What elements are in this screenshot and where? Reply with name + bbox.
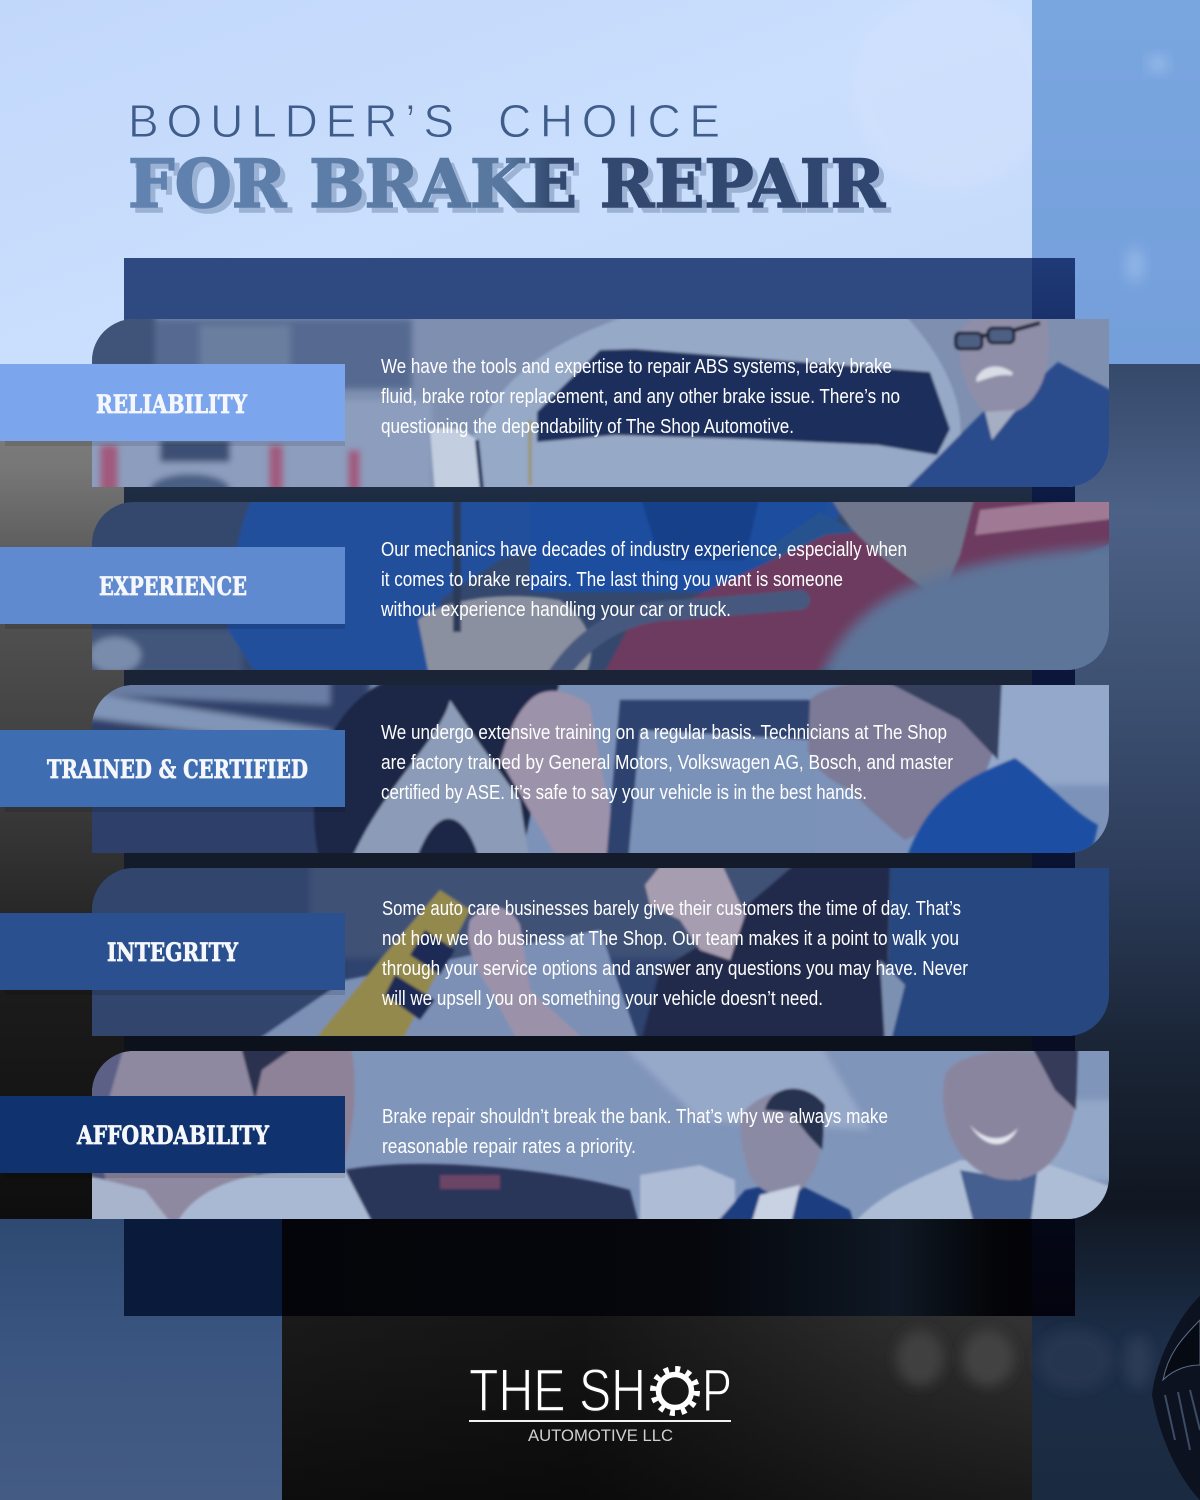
text: integrity [381, 898, 968, 1010]
label: experience: EXPERIENCE [99, 572, 247, 601]
tire at lower right [1152, 1296, 1200, 1500]
text: reliability: We have the tools and expertise to repair ABS systems, leaky brake [381, 356, 892, 378]
title line two: FOR BRAKE REPAIR [133, 150, 891, 228]
label: trained and certified: TRAINED & CERTIFIED [47, 755, 308, 784]
title line one [128, 95, 720, 147]
text: experience: Our mechanics have decades of industry experience, especially when [381, 539, 907, 561]
panel: integrity [0, 868, 1109, 1036]
figure: mechanic in navy jacket [712, 1089, 855, 1228]
label: trained and certified [0, 730, 345, 812]
photo: technician inspecting under car [92, 868, 1109, 1036]
panel: affordability [0, 1051, 1109, 1219]
logo: The Shop Automotive LLC: THE SH [469, 1357, 646, 1424]
text: affordability [382, 1106, 888, 1158]
text: trained and certified: certified by ASE. It’s safe to say your vehicle is in the best hands. [381, 782, 867, 804]
text: integrity: will we upsell you on something your vehicle doesn’t need. [381, 988, 823, 1010]
text: reliability: fluid, brake rotor replacement, and any other brake issue. There’s no [381, 386, 900, 408]
label: affordability [0, 1096, 345, 1178]
text: integrity: not how we do business at The Shop. Our team makes it a point to walk you [382, 928, 959, 950]
text: experience: without experience handling your car or truck. [380, 599, 731, 621]
logo: The Shop Automotive LLC [469, 1357, 732, 1445]
panel: trained and certified [0, 685, 1109, 853]
text: trained and certified [381, 722, 953, 804]
panel: reliability [0, 319, 1109, 487]
figure: mechanic [906, 319, 1109, 487]
title line one: BOULDER’S [128, 95, 454, 147]
title [128, 95, 891, 228]
logo: The Shop Automotive LLC: P [702, 1357, 732, 1424]
figure: smiling man in white coat [856, 1051, 1108, 1219]
icon: gear [653, 1369, 697, 1413]
label: affordability: AFFORDABILITY [76, 1121, 270, 1150]
text: reliability: questioning the dependability of The Shop Automotive. [381, 416, 794, 438]
title line one: CHOICE [498, 95, 720, 147]
text: experience [380, 539, 907, 621]
photo: mechanic hands on brake [92, 502, 1109, 670]
title line two: FOR BRAKE REPAIR [128, 145, 886, 223]
photo: mechanic with car hood [92, 319, 1109, 487]
text: experience: it comes to brake repairs. The last thing you want is someone [381, 569, 843, 591]
photo: customers and mechanics smiling [92, 1051, 1109, 1219]
panel: experience [0, 502, 1109, 670]
label: integrity: INTEGRITY [107, 938, 239, 967]
label: experience [0, 547, 345, 629]
text: trained and certified: We undergo extensive training on a regular basis. Technicians at The Shop [381, 722, 947, 744]
logo: The Shop Automotive LLC: AUTOMOTIVE LLC [528, 1426, 673, 1445]
text: integrity: Some auto care businesses barely give their customers the time of day. That’s [382, 898, 961, 920]
label: reliability: RELIABILITY [96, 390, 248, 419]
photo: technician at wheel [92, 685, 1109, 853]
text: trained and certified: are factory trained by General Motors, Volkswagen AG, Bosch, and master [381, 752, 953, 774]
label: integrity [0, 913, 345, 995]
label: reliability [0, 364, 345, 446]
text: affordability: Brake repair shouldn’t break the bank. That’s why we always make [382, 1106, 888, 1128]
text: affordability: reasonable repair rates a priority. [382, 1136, 636, 1158]
central dark band [124, 258, 1075, 1316]
text: reliability [381, 356, 900, 438]
text: integrity: through your service options and answer any questions you may have. Never [382, 958, 968, 980]
